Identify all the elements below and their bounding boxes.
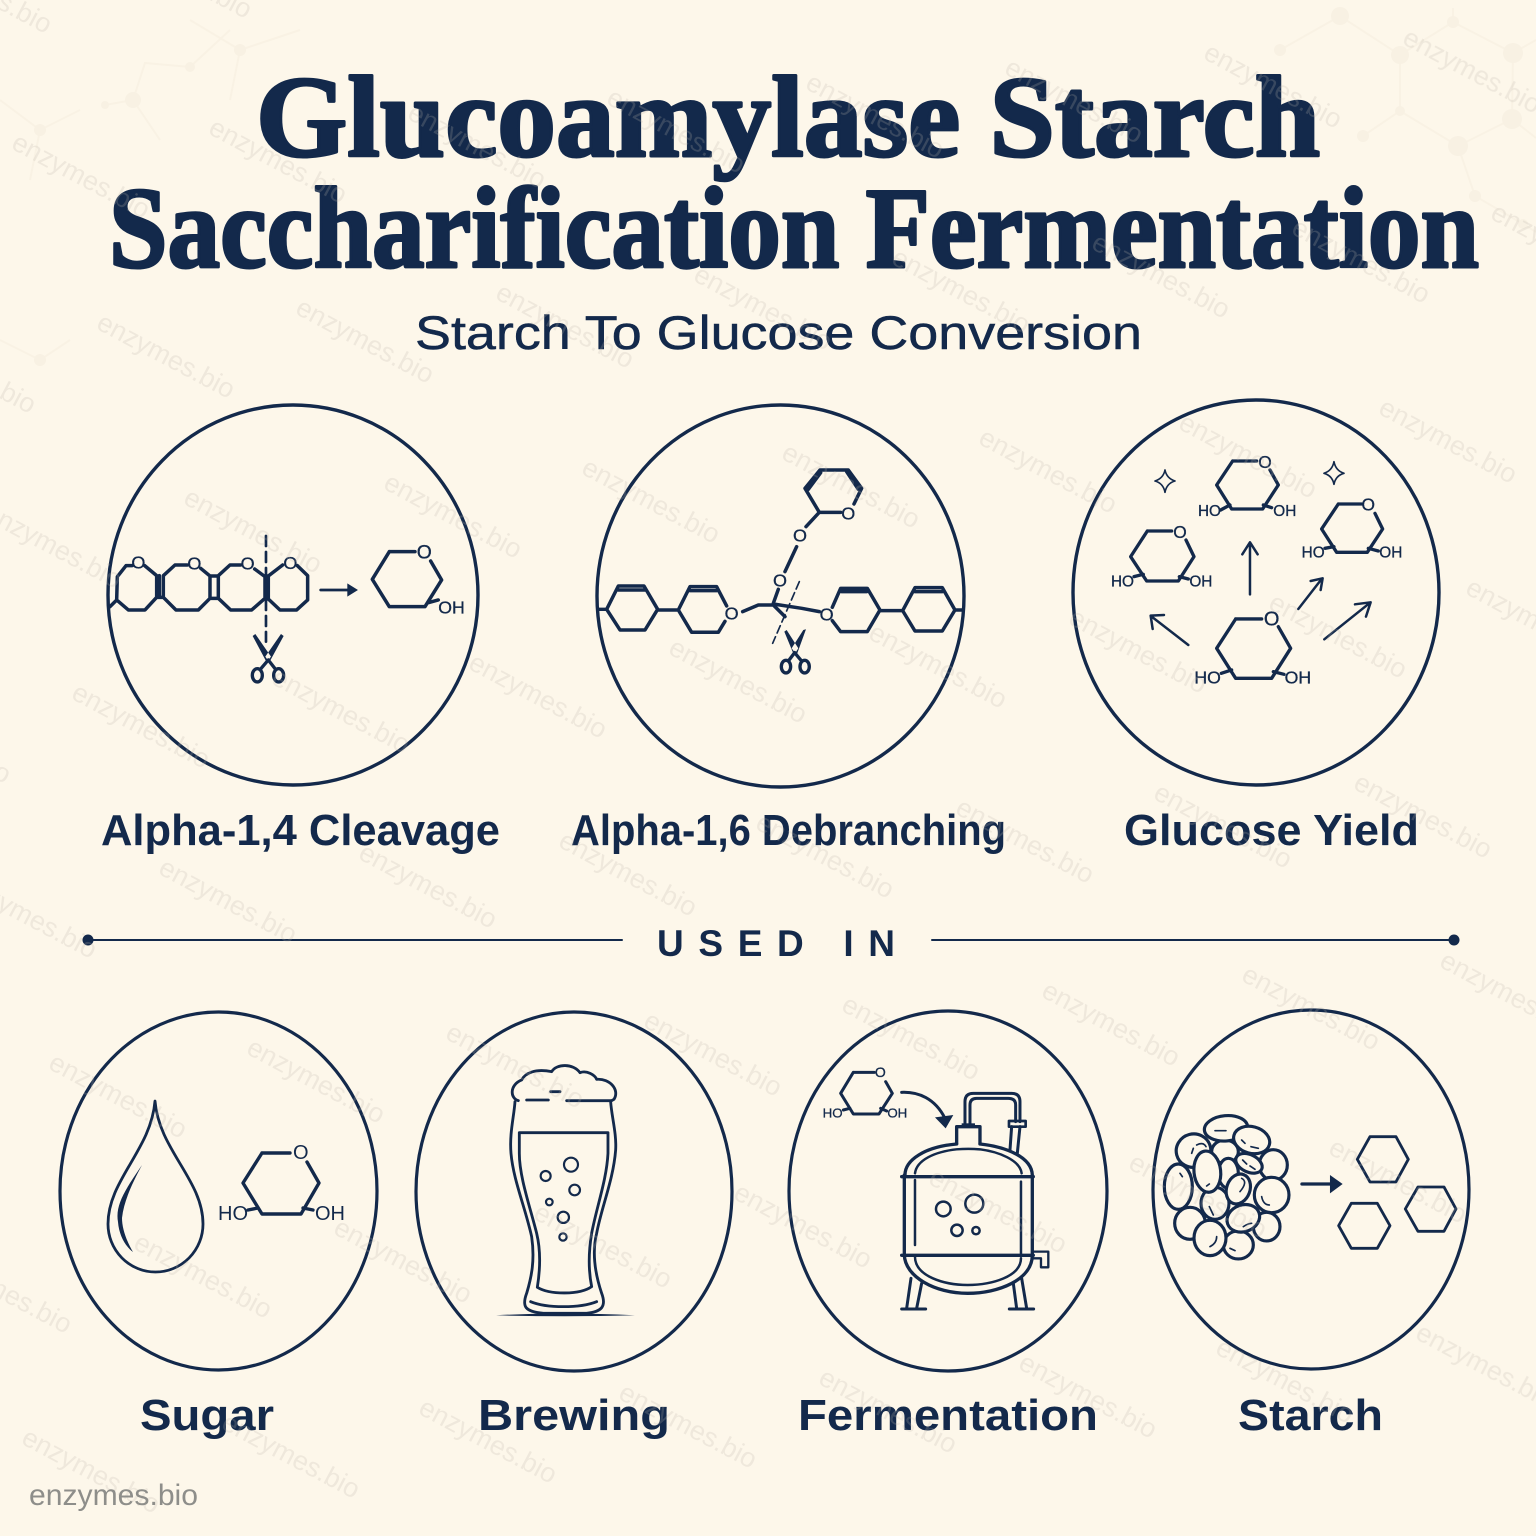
label: sugar: Sugar (140, 1391, 274, 1440)
icon: sugar drop and glucose ring: O (293, 1142, 309, 1164)
watermark pattern: enzymes.bio (179, 482, 327, 579)
icon: glucose molecules released: HO (1194, 667, 1221, 687)
watermark pattern: enzymes.bio (92, 307, 240, 404)
watermark pattern: enzymes.bio (1174, 407, 1322, 504)
watermark pattern: enzymes.bio (491, 277, 639, 374)
watermark pattern: enzymes.bio (17, 1422, 165, 1519)
watermark pattern: enzymes.bio (267, 662, 415, 759)
watermark pattern: enzymes.bio (864, 617, 1012, 714)
panel: brewing (416, 1012, 732, 1371)
watermark pattern: enzymes.bio (1237, 959, 1385, 1056)
watermark pattern: enzymes.bio (639, 1005, 787, 1102)
icon: fermenter vessel with glucose: OH (887, 1106, 907, 1121)
icon: branched chain with scissors (598, 470, 963, 673)
watermark pattern: enzymes.bio (554, 825, 702, 922)
watermark pattern: enzymes.bio (129, 1227, 277, 1324)
icon: sugar drop and glucose ring: HO (218, 1203, 248, 1225)
subtitle: Starch To Glucose Conversion (415, 306, 1142, 359)
icon: starch chain with scissors and released glucose: OH (438, 597, 465, 617)
divider: used in: USED IN (657, 923, 895, 964)
watermark pattern: enzymes.bio (1374, 392, 1522, 489)
watermark pattern: enzymes.bio (751, 807, 899, 904)
watermark pattern: enzymes.bio (242, 1032, 390, 1129)
watermark pattern: enzymes.bio (67, 677, 215, 774)
watermark pattern: enzymes.bio (1000, 52, 1148, 149)
watermark pattern: enzymes.bio (801, 67, 949, 164)
icon: beer glass (496, 1066, 635, 1316)
icon: starch chain with scissors and released glucose: O (283, 553, 297, 573)
icon: starch chain with scissors and released glucose: O (187, 553, 201, 573)
label: starch: Starch (1238, 1391, 1383, 1440)
watermark pattern: enzymes.bio (1149, 777, 1297, 874)
icon: starch chain with scissors and released glucose: O (241, 554, 255, 574)
watermark pattern: enzymes.bio (689, 259, 837, 356)
icon: sugar drop and glucose ring (108, 1101, 345, 1272)
icon: glucose molecules released: HO (1198, 503, 1221, 520)
watermark pattern: enzymes.bio (329, 1212, 477, 1309)
icon: glucose molecules released: OH (1189, 574, 1212, 591)
watermark pattern: enzymes.bio (464, 647, 612, 744)
icon: sugar drop and glucose ring: OH (315, 1203, 345, 1225)
panel: alpha-1,4 cleavage (108, 405, 478, 785)
watermark pattern: enzymes.bio (217, 1407, 365, 1504)
watermark pattern: enzymes.bio (1324, 1132, 1472, 1229)
watermark pattern: enzymes.bio (403, 97, 551, 194)
panel: fermentation (789, 1011, 1107, 1371)
title: Glucoamylase Starch (256, 54, 1320, 182)
watermark pattern: enzymes.bio (1124, 1147, 1272, 1244)
watermark pattern: enzymes.bio (777, 437, 925, 534)
icon: glucose molecules released: OH (1285, 667, 1311, 687)
footer brand: enzymes.bio (29, 1479, 198, 1512)
icon: glucose molecules released: HO (1302, 544, 1325, 561)
watermark pattern: enzymes.bio (291, 292, 439, 389)
watermark pattern: enzymes.bio (154, 852, 302, 949)
watermark pattern: enzymes.bio (1064, 602, 1212, 699)
watermark pattern: enzymes.bio (924, 1162, 1072, 1259)
watermark pattern: enzymes.bio (1349, 767, 1497, 864)
watermark pattern: enzymes.bio (379, 467, 527, 564)
watermark pattern: enzymes.bio (1037, 975, 1185, 1072)
watermark pattern: enzymes.bio (1264, 587, 1412, 684)
watermark pattern: enzymes.bio (614, 1377, 762, 1474)
watermark pattern: enzymes.bio (7, 127, 155, 224)
watermark pattern: enzymes.bio (204, 112, 352, 209)
icon: glucose molecules released: OH (1273, 503, 1296, 520)
icon: starch chain with scissors and released glucose: O (417, 543, 432, 564)
watermark pattern: enzymes.bio (354, 837, 502, 934)
icon: fermenter vessel with glucose (823, 1064, 1048, 1309)
label: brewing: Brewing (478, 1391, 670, 1440)
panel: starch (1153, 1010, 1469, 1369)
icon: glucose molecules released: O (1173, 522, 1187, 542)
icon: glucose molecules released: O (1362, 494, 1375, 514)
icon: glucose molecules released: O (1258, 452, 1272, 472)
watermark pattern: enzymes.bio (887, 242, 1035, 339)
icon: fermenter vessel with glucose: O (875, 1064, 886, 1080)
watermark pattern: enzymes.bio (664, 632, 812, 729)
watermark pattern: enzymes.bio (414, 1392, 562, 1489)
watermark pattern: enzymes.bio (44, 1047, 192, 1144)
icon: glucose molecules released: HO (1111, 574, 1134, 591)
watermark pattern: enzymes.bio (1199, 37, 1347, 134)
icon: starch chain with scissors and released glucose: O (131, 553, 145, 573)
watermark pattern: enzymes.bio (974, 422, 1122, 519)
watermark pattern: enzymes.bio (837, 989, 985, 1086)
watermark pattern: enzymes.bio (602, 82, 750, 179)
icon: branched chain with scissors: O (841, 504, 855, 524)
watermark pattern: enzymes.bio (1014, 1347, 1162, 1444)
icon: branched chain with scissors: O (773, 570, 787, 590)
icon: fermenter vessel with glucose: HO (823, 1106, 843, 1121)
icon: branched chain with scissors: O (820, 604, 834, 624)
icon: branched chain with scissors: O (725, 604, 739, 624)
icon: branched chain with scissors: O (793, 525, 807, 545)
icon: starch granules to hexagons (1164, 1114, 1456, 1259)
watermark pattern: enzymes.bio (1287, 212, 1435, 309)
watermark pattern: enzymes.bio (529, 1197, 677, 1294)
divider: used in (82, 923, 1460, 964)
watermark pattern: enzymes.bio (729, 1177, 877, 1274)
panel: sugar (60, 1012, 377, 1370)
watermark pattern: enzymes.bio (814, 1362, 962, 1459)
watermark pattern: enzymes.bio (1211, 1332, 1359, 1429)
label: glucose yield: Glucose Yield (1124, 806, 1419, 855)
label: fermentation: Fermentation (798, 1391, 1098, 1440)
watermark pattern: enzymes.bio (1087, 227, 1235, 324)
watermark pattern: enzymes.bio (441, 1017, 589, 1114)
icon: glucose molecules released: OH (1379, 544, 1402, 561)
watermark pattern: enzymes.bio (577, 452, 725, 549)
title (109, 54, 1479, 293)
icon: starch chain with scissors and released glucose (110, 536, 465, 682)
panel: glucose yield (1073, 400, 1439, 785)
label: alpha-1,4 cleavage: Alpha-1,4 Cleavage (101, 806, 500, 855)
icon: glucose molecules released (1111, 452, 1402, 687)
label: alpha-1,6 debranching: Alpha-1,6 Debranching (571, 806, 1006, 855)
watermark pattern: enzymes.bio (951, 792, 1099, 889)
panel: alpha-1,6 debranching (597, 405, 964, 787)
icon: glucose molecules released: O (1264, 608, 1279, 630)
